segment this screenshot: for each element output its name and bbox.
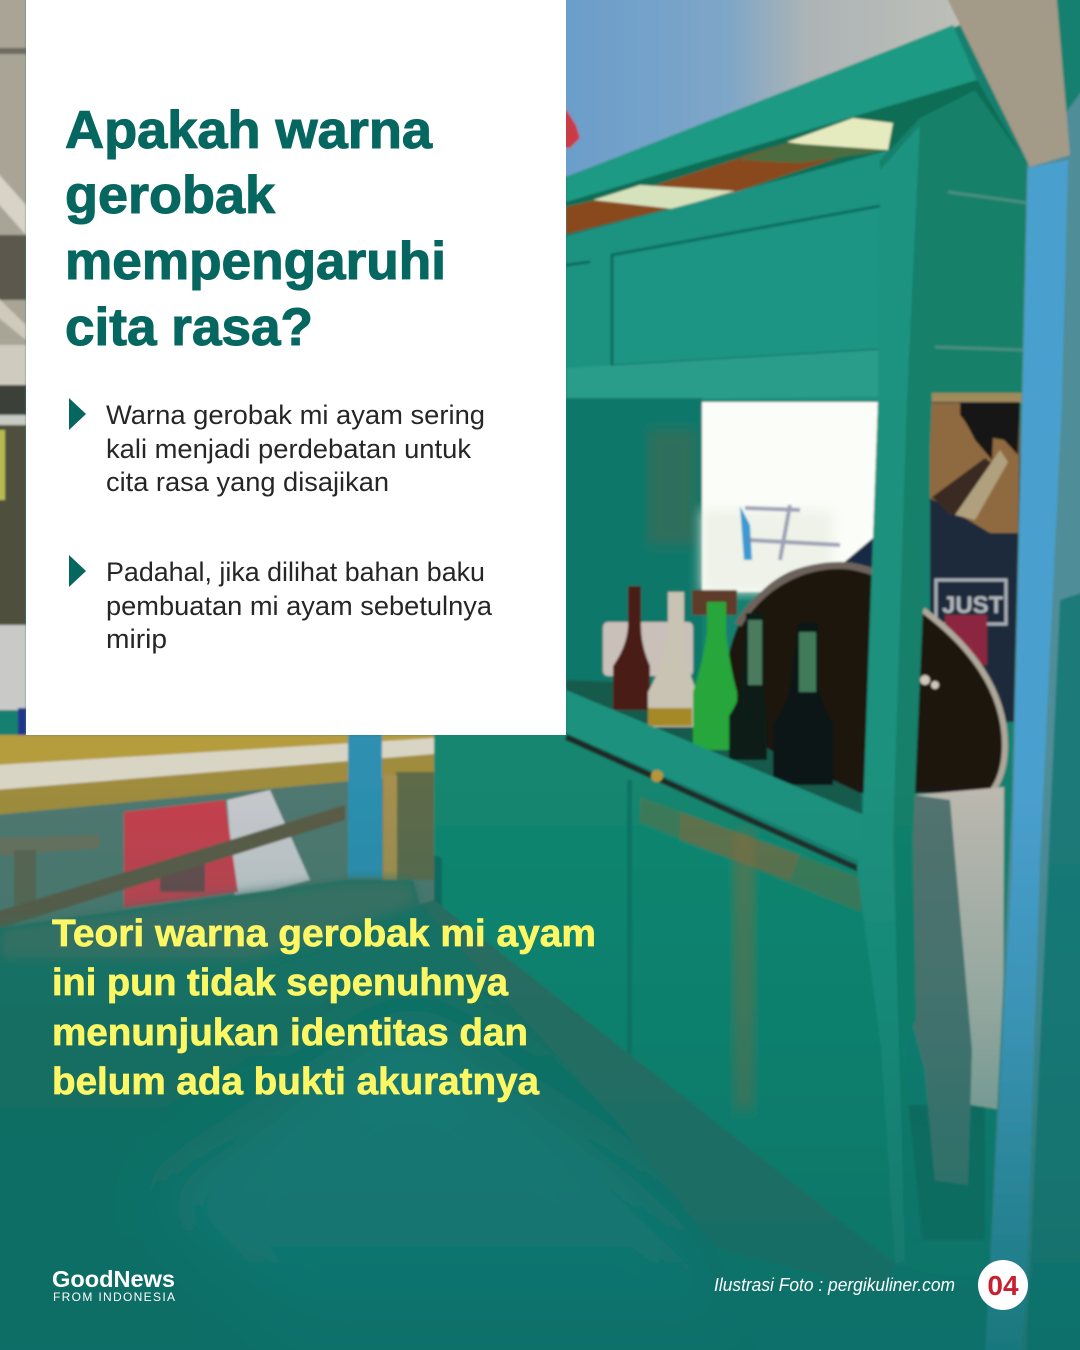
sky and wall at top right xyxy=(560,0,960,179)
lower cart doors xyxy=(418,735,905,1264)
heading: cita rasa? xyxy=(65,298,313,357)
logo: GoodNews from Indonesia: GoodNews xyxy=(52,1266,175,1292)
page number badge: 04 xyxy=(987,1270,1019,1301)
yellow callout text: menunjukan identitas dan xyxy=(52,1012,528,1054)
dark cavity under roof xyxy=(566,80,1030,400)
pot lid xyxy=(727,563,1007,793)
left background strip xyxy=(0,0,26,736)
bullet point 1 xyxy=(69,398,485,497)
heading: gerobak xyxy=(65,166,276,225)
bowls stack xyxy=(603,622,693,676)
back inner wall xyxy=(566,398,702,693)
yellow callout text: belum ada bukti akuratnya xyxy=(52,1061,540,1103)
logo: GoodNews from Indonesia xyxy=(52,1266,175,1304)
wooden corner beam xyxy=(943,0,1070,167)
bullet point 1: Warna gerobak mi ayam sering xyxy=(106,400,485,430)
bottom teal gradient overlay xyxy=(0,780,1080,1350)
upper cart side face xyxy=(907,90,1030,395)
yellow callout text: ini pun tidak sepenuhnya xyxy=(52,962,509,1004)
yellow callout text xyxy=(52,913,596,1103)
bullet point 1: kali menjadi perdebatan untuk xyxy=(106,434,471,464)
upper cabinet front xyxy=(566,118,1028,400)
bullet point 1: cita rasa yang disajikan xyxy=(106,467,389,497)
front shelf rail xyxy=(566,690,876,870)
gaps under the beam xyxy=(566,118,988,234)
heading xyxy=(65,101,446,357)
vertical cart post xyxy=(857,118,932,1264)
bottles xyxy=(613,586,833,785)
bullet point 2: pembuatan mi ayam sebetulnya xyxy=(106,591,493,621)
man behind cart: JUST xyxy=(942,592,1004,619)
bullet point 2: Padahal, jika dilihat bahan baku xyxy=(106,557,485,587)
bullet point 2: mirip xyxy=(106,624,167,654)
dark curb along the cart xyxy=(420,900,895,1290)
man behind cart xyxy=(930,393,1022,722)
foreground floor xyxy=(0,880,895,1350)
photo credit: Ilustrasi Foto : pergikuliner.com xyxy=(714,1275,955,1295)
left background table and stool xyxy=(0,735,434,930)
yellow callout text: Teori warna gerobak mi ayam xyxy=(52,913,596,955)
panel: white question card xyxy=(26,0,566,735)
window xyxy=(692,402,880,615)
heading: mempengaruhi xyxy=(65,232,446,291)
logo: GoodNews from Indonesia: FROM INDONESIA xyxy=(53,1290,175,1304)
roof beam xyxy=(566,25,977,202)
bullet point 2 xyxy=(69,555,493,654)
hanging cloth xyxy=(900,787,1004,1240)
right blue post xyxy=(985,80,1080,1350)
heading: Apakah warna xyxy=(65,101,433,160)
shelf surface xyxy=(566,680,862,815)
page number badge xyxy=(978,1260,1028,1310)
